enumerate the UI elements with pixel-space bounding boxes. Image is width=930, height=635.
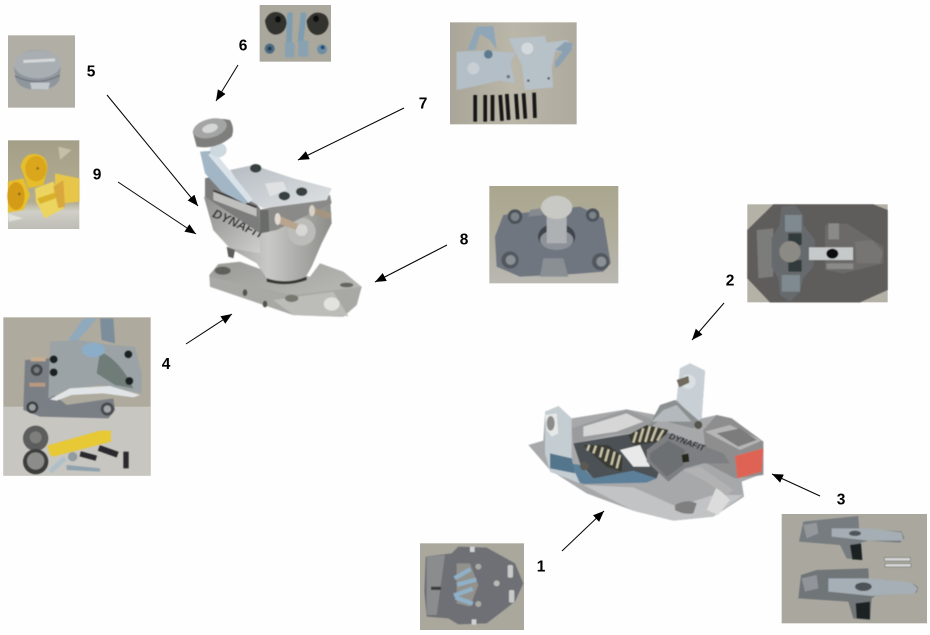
arrow to part 5 (107, 95, 198, 206)
arrow to part 7 (298, 108, 404, 160)
heel body: DYNAFIT (210, 207, 267, 242)
photo 8: base plate with post (489, 186, 618, 283)
label 9: 9 (93, 166, 102, 184)
label 6: 6 (239, 38, 248, 54)
photo 5: threaded cap (8, 35, 75, 108)
toe front block (703, 415, 763, 478)
toe left bracket (545, 406, 589, 483)
arrow to part 3 (772, 474, 820, 496)
heel base (209, 262, 362, 317)
arrow to part 1 (562, 511, 604, 551)
toe rear frame (572, 409, 655, 443)
label 7: 7 (419, 96, 427, 112)
lever arm with roller (191, 115, 253, 204)
toe arm plate with logo (647, 431, 733, 495)
label 1: 1 (537, 558, 546, 576)
heel body (204, 197, 332, 284)
arrow to part 4 (186, 314, 232, 344)
main part: heel unit (191, 115, 362, 317)
main part: toe unit (528, 363, 763, 521)
label 4: 4 (162, 356, 171, 373)
heel top plate (205, 164, 332, 233)
photo 7: metal plates and black screws (450, 22, 577, 124)
red logo patch (735, 448, 763, 478)
label 3: 3 (837, 492, 846, 508)
photo 3: toe levers and pins (782, 514, 927, 623)
toe right bracket (647, 363, 705, 430)
arrow to part 8 (375, 245, 447, 282)
toe arm plate with logo: DYNAFIT (668, 431, 707, 453)
toe silhouette and base plate (528, 363, 763, 521)
heel bolts (275, 205, 332, 230)
toe interior (573, 430, 667, 478)
label 5: 5 (87, 64, 96, 80)
photo 1: base plate with screws (420, 543, 524, 630)
photo 2: toe piece from above (747, 204, 888, 302)
label 8: 8 (460, 232, 469, 248)
photo 6: rubber rollers and bolts (260, 5, 331, 62)
photo 4: assembled plate kit in a bag (3, 317, 151, 476)
toe springs (583, 425, 668, 472)
label 2: 2 (726, 272, 734, 290)
arrow to part 6 (216, 65, 238, 101)
arrow to part 9 (118, 182, 196, 234)
arrow to part 2 (692, 303, 724, 340)
photo 9: yellow plastic cups (7, 140, 79, 229)
